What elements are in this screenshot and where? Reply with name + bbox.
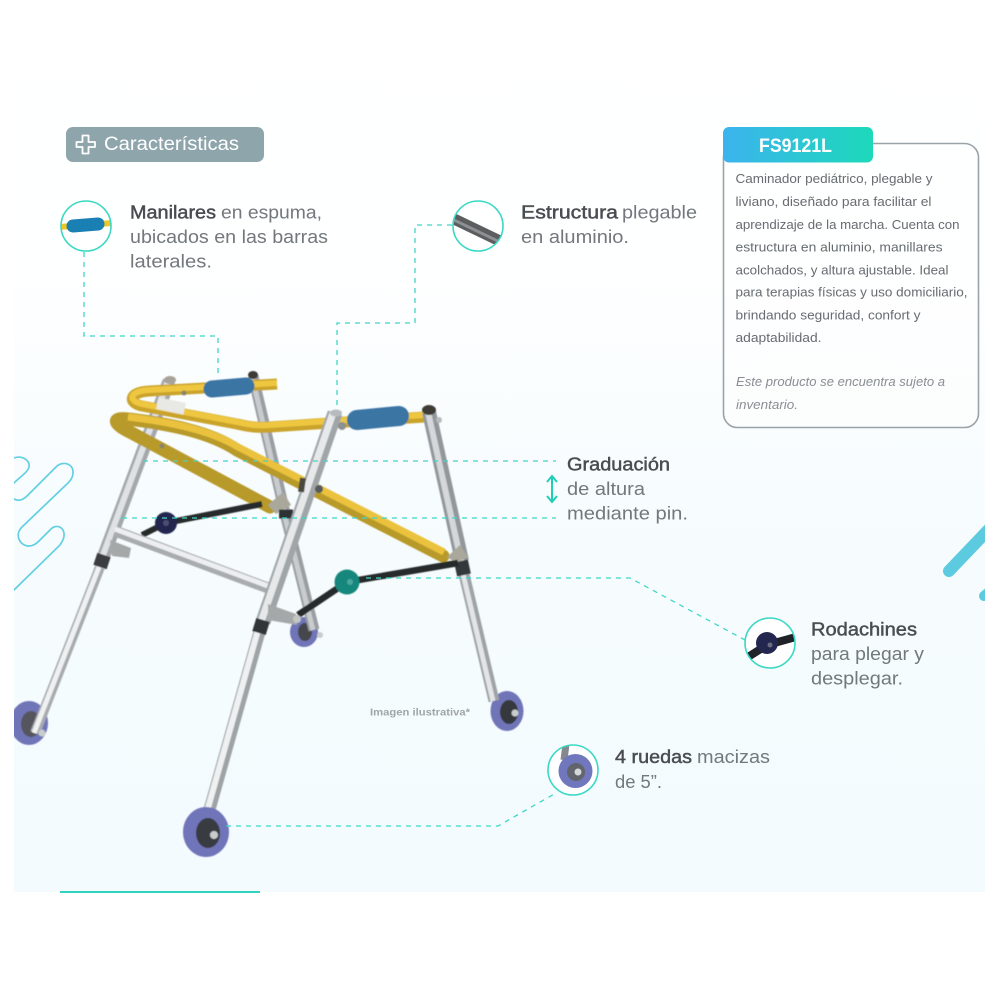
foam grip front — [357, 416, 399, 420]
infographic canvas — [14, 127, 985, 893]
icon: folding knob — [745, 618, 796, 668]
description text: liviano, diseñado para facilitar el — [736, 195, 932, 209]
left rear leg — [103, 376, 176, 555]
front leg — [259, 410, 346, 633]
feature: estructura: Estructura — [521, 202, 619, 222]
back leg — [248, 371, 323, 638]
feature: rodachines — [745, 618, 924, 688]
description text — [736, 172, 968, 345]
feature: 4 ruedas — [548, 744, 770, 795]
panel: product description — [723, 127, 978, 428]
left lower tube — [34, 540, 131, 736]
icon: aluminium tube — [452, 201, 504, 251]
description text: Caminador pediátrico, plegable y — [736, 172, 933, 186]
availability note: inventario. — [736, 398, 798, 412]
description text: adaptabilidad. — [736, 331, 822, 345]
description text: estructura en aluminio, manillares — [736, 240, 942, 254]
front wheel — [183, 630, 260, 857]
left rear wheel — [10, 701, 48, 745]
description text: acolchados, y altura ajustable. Ideal — [736, 264, 948, 278]
decorative strokes right — [949, 526, 996, 596]
heading: características — [66, 127, 264, 162]
feature: graduación: Graduación — [567, 454, 670, 474]
feature: manilares — [60, 201, 328, 272]
feature: graduación: de altura — [567, 479, 646, 499]
icon: plus — [76, 136, 95, 154]
badge: model code — [723, 127, 873, 162]
feature: rodachines: para plegar y — [811, 644, 924, 664]
feature: 4 ruedas: de 5”. — [615, 772, 662, 792]
feature: estructura: plegable — [622, 202, 697, 222]
upper yellow rail — [132, 383, 425, 427]
front strut with teal knob — [298, 563, 458, 615]
feature: 4 ruedas: macizas — [697, 747, 770, 767]
availability note — [736, 375, 945, 412]
foam grip rear — [212, 386, 246, 389]
note: imagen ilustrativa: Imagen ilustrativa* — [370, 706, 471, 718]
illustration: pediatric walker — [10, 371, 524, 857]
feature: 4 ruedas: 4 ruedas — [615, 747, 692, 767]
back wheel — [290, 617, 318, 647]
heading: características: Características — [104, 134, 239, 155]
feature: estructura: en aluminio. — [521, 227, 629, 247]
badge: model code: FS9121L — [759, 136, 832, 157]
feature: graduación: mediante pin. — [567, 504, 688, 524]
description text: para terapias físicas y uso domiciliario, — [736, 286, 968, 300]
feature: graduación — [547, 454, 688, 524]
right wheel — [490, 691, 524, 731]
feature: estructura — [452, 201, 697, 251]
right leg — [422, 405, 518, 716]
feature: rodachines: desplegar. — [811, 668, 903, 688]
black strut rear — [142, 504, 293, 535]
description text: brindando seguridad, confort y — [736, 308, 921, 322]
feature: rodachines: Rodachines — [811, 620, 917, 640]
icon: foam grip — [60, 201, 112, 251]
decorative squiggle left — [14, 457, 73, 590]
feature: manilares: Manilares — [130, 202, 216, 222]
feature: manilares: en espuma, — [221, 202, 322, 222]
bottom accent line — [60, 891, 260, 893]
icon: wheel — [548, 744, 598, 795]
icon: double arrow — [547, 476, 557, 502]
folding bracket rear — [268, 492, 291, 514]
connector lines — [84, 225, 745, 826]
description text: aprendizaje de la marcha. Cuenta con — [736, 218, 960, 232]
underside yellow rail and lower yellow rail — [116, 417, 444, 556]
feature: manilares: laterales. — [130, 252, 212, 272]
silver cross bar — [115, 529, 268, 588]
feature: manilares: ubicados en las barras — [130, 227, 328, 247]
availability note: Este producto se encuentra sujeto a — [736, 375, 945, 389]
